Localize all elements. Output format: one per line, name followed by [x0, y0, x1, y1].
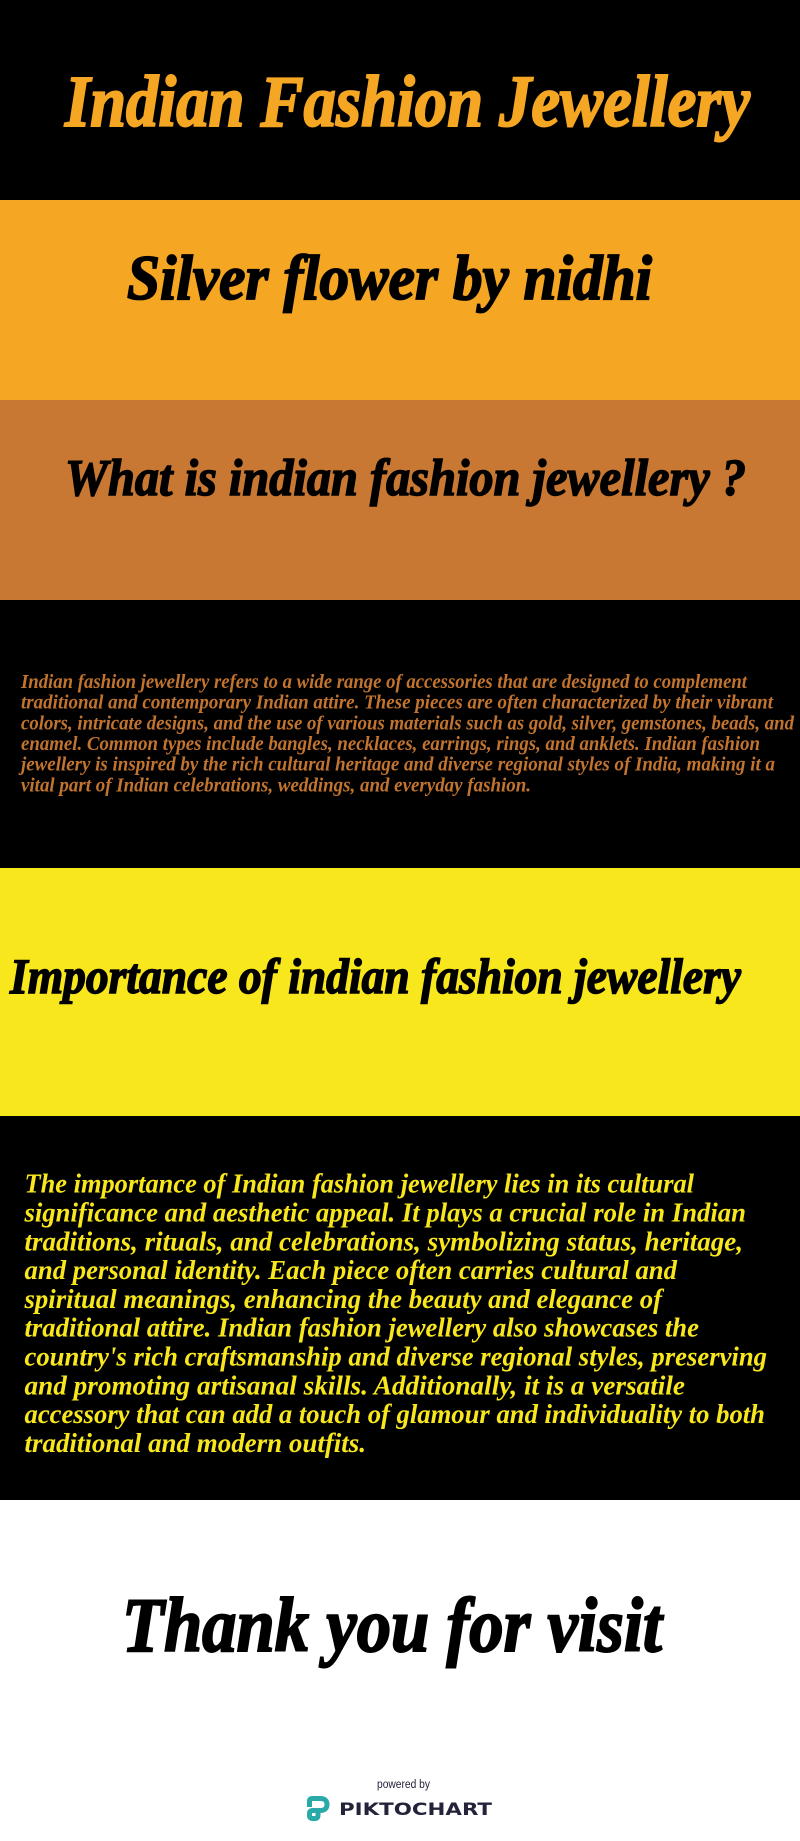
- heading: thank you: Thank you for visit: [122, 1582, 664, 1668]
- text block: importance paragraph: traditions, rituals, and celebrations, symbolizing status, heritage,: [24, 1226, 743, 1256]
- panel: title band: [0, 0, 800, 200]
- panel: importance heading band: [0, 868, 800, 1116]
- text block: importance paragraph: significance and aesthetic appeal. It plays a crucial role in Indian: [24, 1198, 746, 1228]
- panel: closing: [0, 1500, 800, 1841]
- panel: question band: [0, 400, 800, 600]
- icon: piktochart logo: [310, 1798, 327, 1818]
- panel: author band: [0, 200, 800, 400]
- text block: importance paragraph: The importance of Indian fashion jewellery lies in its cultural: [24, 1169, 694, 1199]
- panel: definition: [0, 600, 800, 868]
- text block: definition paragraph: jewellery is inspired by the rich cultural heritage and diverse regional styles of India, making it a: [18, 754, 775, 776]
- panel: importance text: [0, 1116, 800, 1500]
- text block: importance paragraph: [24, 1169, 767, 1458]
- text block: definition paragraph: vital part of Indian celebrations, weddings, and everyday fashion.: [21, 774, 531, 796]
- text: powered by: powered by: [377, 1779, 430, 1791]
- heading: importance: Importance of indian fashion jewellery: [9, 948, 742, 1004]
- text block: definition paragraph: [18, 671, 795, 796]
- text block: importance paragraph: spiritual meanings, enhancing the beauty and elegance of: [24, 1284, 665, 1314]
- heading: author: Silver flower by nidhi: [127, 242, 652, 313]
- text block: importance paragraph: traditional attire. Indian fashion jewellery also showcases the: [24, 1313, 699, 1343]
- text block: definition paragraph: Indian fashion jewellery refers to a wide range of accessories that are designed to complement: [20, 671, 748, 693]
- text block: importance paragraph: country's rich craftsmanship and diverse regional styles, preserving: [24, 1342, 767, 1372]
- text block: importance paragraph: traditional and modern outfits.: [24, 1428, 366, 1458]
- heading: question: What is indian fashion jewellery ?: [65, 450, 746, 507]
- text block: importance paragraph: and personal identity. Each piece often carries cultural and: [24, 1255, 677, 1285]
- text block: importance paragraph: and promoting artisanal skills. Additionally, it is a versatile: [24, 1370, 685, 1400]
- text block: importance paragraph: accessory that can add a touch of glamour and individuality to both: [24, 1399, 765, 1429]
- text block: definition paragraph: enamel. Common types include bangles, necklaces, earrings, rings, and anklets. Indian fashion: [21, 733, 760, 755]
- text block: definition paragraph: traditional and contemporary Indian attire. These pieces are often characterized by their vibrant: [21, 692, 774, 714]
- text: piktochart wordmark: PIKTOCHART: [339, 1800, 492, 1820]
